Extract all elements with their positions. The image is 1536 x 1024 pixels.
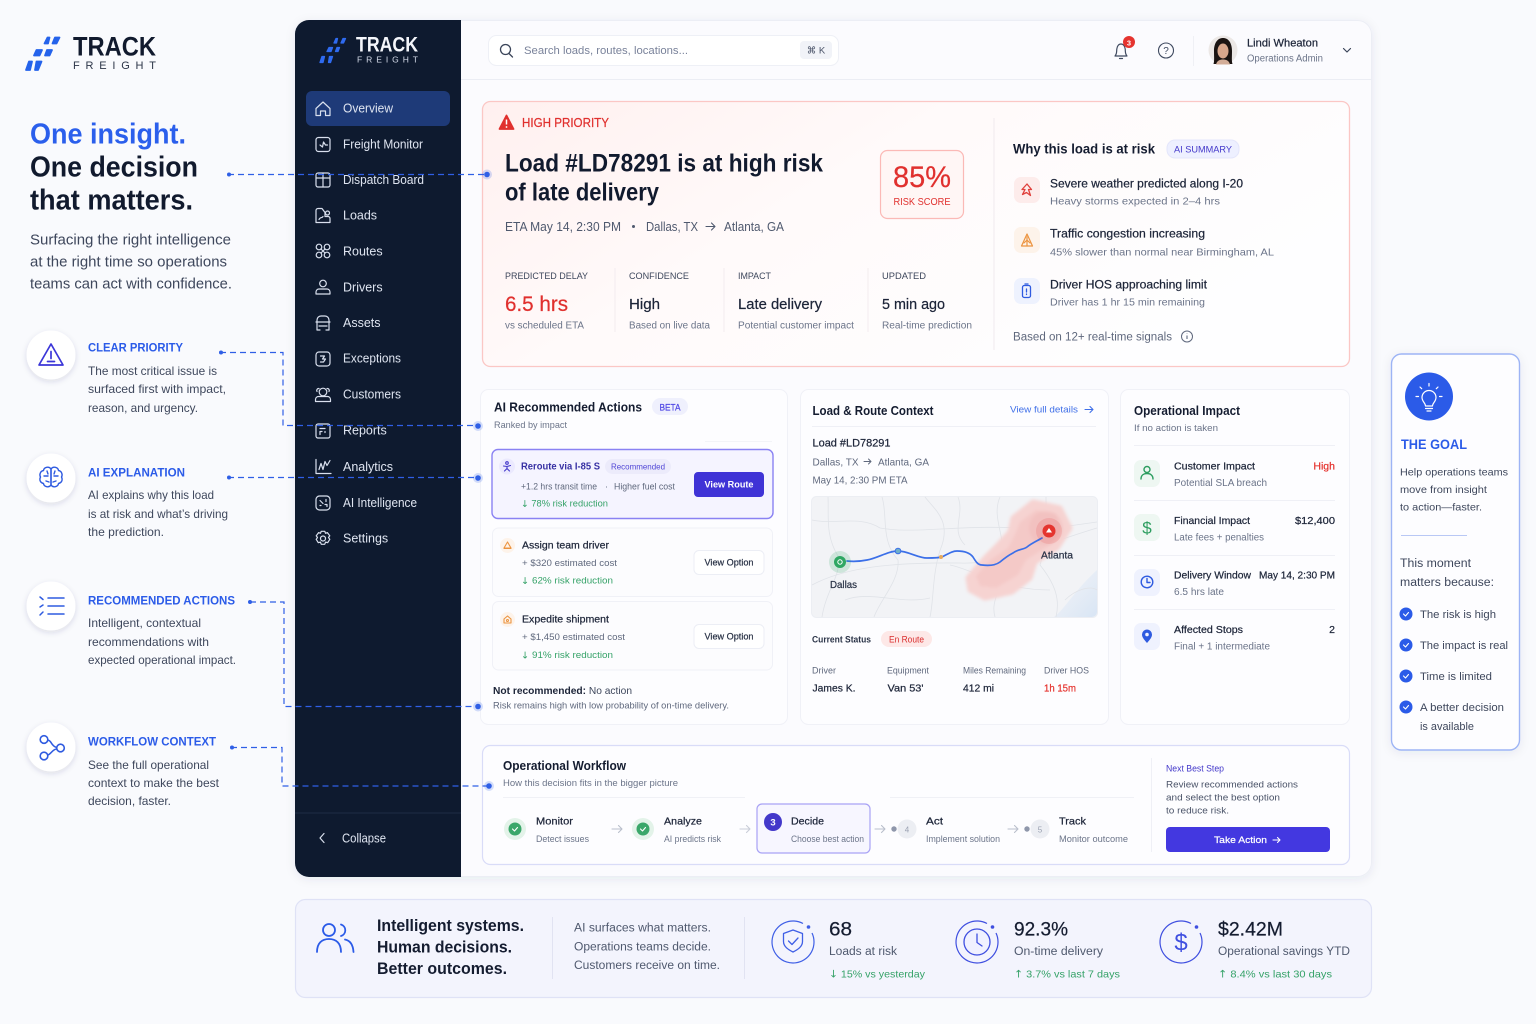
brand logo: TRACK xyxy=(73,32,156,62)
check: impact: The impact is real xyxy=(1420,640,1508,652)
nav: AI intelligence xyxy=(316,496,417,510)
option: reroute via I-85 S: ↓ 78% risk reduction xyxy=(521,499,608,510)
feature: workflow context xyxy=(26,722,220,808)
why this moment matters xyxy=(1400,558,1494,589)
panel: AI recommended actions: AI Recommended Actions xyxy=(494,400,642,415)
sidebar logo: FREIGHT xyxy=(357,55,418,65)
row: financial impact: $ xyxy=(1142,519,1152,538)
sidebar logo xyxy=(320,34,418,65)
connector lines xyxy=(219,170,494,791)
option: assign team driver: Assign team driver xyxy=(522,540,609,552)
check: time: Time is limited xyxy=(1420,671,1492,683)
ETA and route line: Dallas, TX xyxy=(646,220,699,234)
row: affected stops: Affected Stops xyxy=(1174,624,1243,636)
row: affected stops: Final + 1 intermediate xyxy=(1174,642,1270,653)
nav: reports: Reports xyxy=(343,424,387,438)
feature: recommended actions: recommendations with xyxy=(88,636,209,649)
icon: dollar xyxy=(1160,921,1202,963)
load facts: Driver HOS xyxy=(1044,666,1089,676)
load facts: Equipment xyxy=(887,666,929,676)
nav: drivers xyxy=(316,280,383,295)
row: financial impact xyxy=(1134,514,1335,544)
headline: One insight. xyxy=(30,119,186,151)
current status: Current Status xyxy=(812,635,871,645)
row: delivery window: Delivery Window xyxy=(1174,570,1251,582)
checklist xyxy=(1400,608,1508,733)
nav: assets: Assets xyxy=(343,316,381,330)
ETA and route line: ETA May 14, 2:30 PM xyxy=(505,220,621,234)
why this moment matters: This moment xyxy=(1400,558,1472,570)
nav: analytics: Analytics xyxy=(343,460,393,474)
feature: recommended actions: Intelligent, contextual xyxy=(88,617,201,630)
step: analyze xyxy=(632,816,721,844)
icon: list xyxy=(26,582,76,630)
button: view route xyxy=(694,472,764,497)
metric: impact: IMPACT xyxy=(738,271,771,281)
panel: operational workflow: How this decision fits in the bigger picture xyxy=(503,778,678,789)
step: decide: Choose best action xyxy=(791,834,864,844)
option: reroute via I-85 S: +1.2 hrs transit time xyxy=(521,482,597,492)
feature: recommended actions: RECOMMENDED ACTIONS xyxy=(88,594,235,608)
load facts: Van 53' xyxy=(888,683,924,695)
panel: operational impact: Operational Impact xyxy=(1134,403,1241,418)
nav: loads xyxy=(316,208,377,223)
nav: assets xyxy=(316,316,381,330)
step: analyze: Analyze xyxy=(664,816,702,828)
route and ETA: Dallas, TX xyxy=(812,457,858,469)
row: customer impact: High xyxy=(1313,461,1335,473)
panel: the goal: THE GOAL xyxy=(1401,437,1467,452)
feature: clear priority: surfaced first with impact, xyxy=(88,383,226,396)
button: take action xyxy=(1166,827,1330,852)
waypoints xyxy=(895,548,943,559)
stat: loads at risk xyxy=(772,920,926,981)
AI summary pill xyxy=(1167,140,1239,158)
reason: driver HOS xyxy=(1014,278,1208,309)
step: decide: Decide xyxy=(791,816,824,828)
arrow xyxy=(875,826,885,832)
tagline xyxy=(377,917,524,978)
feature: workflow context: decision, faster. xyxy=(88,795,171,808)
next best step: and select the best option xyxy=(1166,793,1280,804)
row: delivery window xyxy=(1134,569,1335,598)
nav: dispatch board: Dispatch Board xyxy=(343,173,424,187)
arrow xyxy=(1008,826,1018,832)
metric: confidence: CONFIDENCE xyxy=(629,271,689,281)
metric: impact: Late delivery xyxy=(738,296,822,313)
next best step: to reduce risk. xyxy=(1166,806,1229,817)
current status: En Route xyxy=(889,635,924,645)
icon: workflow nodes xyxy=(26,722,76,772)
metric: confidence: Based on live data xyxy=(629,321,710,332)
next best step: Next Best Step xyxy=(1166,764,1224,774)
step: analyze: AI predicts risk xyxy=(664,834,721,844)
supporting text: Operations teams decide. xyxy=(574,942,711,954)
nav: reports xyxy=(316,424,387,438)
search box: Search loads, routes, locations... xyxy=(524,45,688,57)
route and ETA: Atlanta, GA xyxy=(878,457,929,469)
alert headline xyxy=(505,150,823,207)
stat: operational savings: $2.42M xyxy=(1218,920,1283,941)
alert headline: of late delivery xyxy=(505,179,659,207)
panel: sidebar xyxy=(295,20,461,877)
intro paragraph xyxy=(30,233,232,293)
step: act: Act xyxy=(926,816,943,828)
step: act: Implement solution xyxy=(926,834,1000,844)
panel: operational impact: If no action is taken xyxy=(1134,423,1218,434)
button: take action: Take Action xyxy=(1214,835,1267,846)
nav: overview active xyxy=(306,91,450,126)
tagline: Better outcomes. xyxy=(377,960,507,978)
metric: confidence xyxy=(629,271,710,332)
row: delivery window: 6.5 hrs late xyxy=(1174,587,1224,598)
headline xyxy=(30,119,198,217)
stat: on-time delivery: On-time delivery xyxy=(1014,946,1103,958)
icon: dollar: $ xyxy=(1174,930,1188,957)
option: expedite shipment: + $1,450 estimated cost xyxy=(522,632,625,643)
AI summary pill: AI SUMMARY xyxy=(1174,145,1232,155)
option: expedite shipment xyxy=(492,602,772,670)
panel: operational workflow: Operational Workflow xyxy=(503,758,627,773)
feature: AI explanation: AI explains why this load xyxy=(88,489,214,502)
feature: clear priority xyxy=(26,330,226,415)
step: track: Monitor outcome xyxy=(1059,834,1128,844)
step: monitor: Monitor xyxy=(536,816,574,828)
notification bell xyxy=(1115,36,1135,58)
row: customer impact xyxy=(1134,460,1335,489)
option: reroute via I-85 S: Higher fuel cost xyxy=(614,482,675,492)
stat: operational savings: ↑ 8.4% vs last 30 days xyxy=(1218,969,1332,981)
goal description: move from insight xyxy=(1400,484,1487,496)
intro paragraph: Surfacing the right intelligence xyxy=(30,233,231,249)
check: risk: The risk is high xyxy=(1420,609,1496,621)
metric: predicted delay: PREDICTED DELAY xyxy=(505,271,588,281)
icon: lightbulb xyxy=(1405,372,1453,420)
feature: clear priority: The most critical issue is xyxy=(88,365,217,378)
next best step: Review recommended actions xyxy=(1166,780,1298,791)
nav: customers: Customers xyxy=(343,388,401,402)
stat: on-time delivery: 92.3% xyxy=(1014,920,1068,941)
nav: freight monitor: Freight Monitor xyxy=(343,138,423,152)
route line xyxy=(847,538,1042,565)
feature: AI explanation: the prediction. xyxy=(88,526,164,539)
alert headline: Load #LD78291 is at high risk xyxy=(505,150,823,178)
reason: severe weather xyxy=(1014,177,1243,208)
panel: operational workflow xyxy=(482,746,1350,864)
help icon xyxy=(1158,43,1174,58)
sidebar logo: TRACK xyxy=(356,34,418,57)
why this load is at risk xyxy=(1013,140,1274,344)
panel: the goal xyxy=(1392,354,1520,750)
option: expedite shipment: ↓ 91% risk reduction xyxy=(521,650,613,661)
panel: AI recommended actions: Ranked by impact xyxy=(494,420,567,431)
row: affected stops: 2 xyxy=(1329,624,1335,636)
feature: AI explanation: is at risk and what’s driving xyxy=(88,508,228,521)
user profile: Operations Admin xyxy=(1247,54,1323,65)
stat: loads at risk: ↓ 15% vs yesterday xyxy=(829,969,926,981)
nav: exceptions: Exceptions xyxy=(343,352,401,366)
brand logo: FREIGHT xyxy=(73,60,156,72)
current status xyxy=(812,631,932,647)
stat: on-time delivery: ↑ 3.7% vs last 7 days xyxy=(1014,969,1120,981)
pin: Dallas: Dallas xyxy=(830,580,857,591)
feature: workflow context: WORKFLOW CONTEXT xyxy=(88,735,217,749)
option: reroute via I-85 S: Reroute via I-85 S xyxy=(521,461,600,473)
step: act: 4 xyxy=(905,826,910,835)
help icon: ? xyxy=(1163,46,1169,57)
icon: alert triangle xyxy=(500,116,514,129)
icon: people xyxy=(317,924,354,952)
beta pill xyxy=(652,398,688,415)
metric: predicted delay: 6.5 hrs xyxy=(505,293,568,316)
route and ETA: May 14, 2:30 PM ETA xyxy=(812,475,908,487)
goal description: to action—faster. xyxy=(1400,502,1482,514)
step: decide: 3 xyxy=(770,818,776,829)
reason: traffic congestion: Traffic congestion increasing xyxy=(1050,229,1205,241)
headline: that matters. xyxy=(30,185,193,217)
dashboard card xyxy=(295,20,1372,877)
why this moment matters: matters because: xyxy=(1400,577,1494,589)
panel: operational impact xyxy=(1120,390,1350,724)
goal description: Help operations teams xyxy=(1400,467,1508,479)
nav: loads: Loads xyxy=(343,209,377,223)
ETA and route line: Atlanta, GA xyxy=(724,220,785,234)
panel: bottom summary band xyxy=(296,900,1372,998)
nav: overview active: Overview xyxy=(343,102,394,116)
reason: traffic congestion: 45% slower than normal near Birmingham, AL xyxy=(1050,247,1274,259)
step: track: 5 xyxy=(1038,826,1043,835)
check: better decision xyxy=(1400,700,1504,733)
row: financial impact: $12,400 xyxy=(1295,515,1335,527)
supporting text: Customers receive on time. xyxy=(574,960,720,972)
stat: loads at risk: Loads at risk xyxy=(829,946,897,958)
nav: drivers: Drivers xyxy=(343,281,383,295)
nav: collapse: Collapse xyxy=(342,832,386,846)
load facts: Driver xyxy=(812,666,836,676)
metric: confidence: High xyxy=(629,296,660,313)
button: view option: View Option xyxy=(704,632,754,643)
row: affected stops xyxy=(1134,623,1335,653)
ETA and route line xyxy=(505,220,785,234)
not recommended note xyxy=(493,685,729,712)
load facts: 1h 15m xyxy=(1044,683,1076,695)
not recommended note: Risk remains high with low probability of on-time delivery. xyxy=(493,701,729,712)
step: monitor: Detect issues xyxy=(536,834,589,844)
tagline: Intelligent systems. xyxy=(377,917,524,935)
option: reroute via I-85 S: Recommended xyxy=(611,463,665,472)
stat: on-time delivery xyxy=(956,920,1120,981)
tagline: Human decisions. xyxy=(377,939,512,957)
nav: collapse xyxy=(320,832,386,846)
reason: traffic congestion xyxy=(1014,227,1274,259)
route map xyxy=(812,496,1098,618)
metric: updated xyxy=(882,271,972,332)
signals footnote: Based on 12+ real-time signals xyxy=(1013,332,1172,344)
panel: high priority alert xyxy=(482,102,1350,366)
load facts: James K. xyxy=(812,683,856,695)
icon: shield xyxy=(772,921,814,963)
load facts xyxy=(812,666,1089,695)
option: assign team driver: + $320 estimated cost xyxy=(522,558,617,569)
step: decide xyxy=(757,804,870,853)
arrow xyxy=(612,826,622,832)
option: assign team driver xyxy=(492,528,772,596)
user profile xyxy=(1208,36,1350,65)
load facts: 412 mi xyxy=(963,683,994,695)
stat: operational savings: Operational savings YTD xyxy=(1218,946,1350,958)
option: reroute via I-85 S xyxy=(492,450,773,518)
step: act xyxy=(891,816,1000,844)
why this load is at risk: Why this load is at risk xyxy=(1013,141,1155,157)
metric: updated: UPDATED xyxy=(882,271,927,281)
check: better decision: is available xyxy=(1420,721,1474,733)
link: view full details: View full details xyxy=(1010,405,1078,416)
nav: settings xyxy=(316,531,388,546)
risk score badge: RISK SCORE xyxy=(894,197,951,208)
feature: AI explanation: AI EXPLANATION xyxy=(88,466,185,480)
search box xyxy=(488,36,838,66)
nav: exceptions xyxy=(316,352,401,366)
nav: settings: Settings xyxy=(343,532,388,546)
panel: load and route context: Load #LD78291 xyxy=(812,438,890,450)
panel: load and route context: Load & Route Context xyxy=(812,403,934,418)
stat: loads at risk: 68 xyxy=(829,920,852,941)
headline: One decision xyxy=(30,152,198,184)
pin: Atlanta: Atlanta xyxy=(1041,551,1073,562)
row: financial impact: Financial Impact xyxy=(1174,515,1250,527)
pin: Dallas xyxy=(829,551,857,591)
feature: AI explanation xyxy=(26,454,228,539)
metric: impact xyxy=(738,271,854,332)
panel: load and route context xyxy=(800,390,1108,724)
metric: predicted delay xyxy=(505,271,588,332)
header bar xyxy=(461,36,1372,80)
notification bell: 3 xyxy=(1127,39,1131,48)
risk score badge: 85% xyxy=(893,161,951,194)
feature: recommended actions: expected operational impact. xyxy=(88,654,236,667)
intro paragraph: teams can act with confidence. xyxy=(30,277,232,293)
panel: high priority alert: HIGH PRIORITY xyxy=(522,116,610,130)
reason: driver HOS: Driver HOS approaching limit xyxy=(1050,280,1208,292)
search box: ⌘ K xyxy=(807,46,826,57)
nav: AI intelligence: AI Intelligence xyxy=(343,496,417,510)
metric: predicted delay: vs scheduled ETA xyxy=(505,321,584,332)
step: track: Track xyxy=(1059,816,1087,828)
metric: updated: 5 min ago xyxy=(882,296,945,313)
check: better decision: A better decision xyxy=(1420,702,1504,714)
row: delivery window: May 14, 2:30 PM xyxy=(1259,570,1335,582)
button: view option xyxy=(694,624,764,648)
goal description xyxy=(1400,467,1508,514)
feature: recommended actions xyxy=(26,582,236,667)
not recommended note: Not recommended: No action xyxy=(493,685,632,697)
button: view route: View Route xyxy=(704,480,754,491)
supporting text xyxy=(574,923,720,972)
icon: warning triangle xyxy=(26,330,76,380)
row: customer impact: Customer Impact xyxy=(1174,461,1255,473)
load facts: Miles Remaining xyxy=(963,666,1026,676)
row: financial impact: Late fees + penalties xyxy=(1174,533,1264,544)
beta pill: BETA xyxy=(660,403,680,413)
feature: workflow context: context to make the best xyxy=(88,777,220,790)
user profile: Lindi Wheaton xyxy=(1247,38,1318,50)
step: track xyxy=(1024,816,1128,844)
metric: updated: Real-time prediction xyxy=(882,321,972,332)
reason: driver HOS: Driver has 1 hr 15 min remaining xyxy=(1050,297,1205,309)
nav: routes: Routes xyxy=(343,245,383,259)
option: expedite shipment: Expedite shipment xyxy=(522,614,609,626)
icon: clock xyxy=(956,921,998,963)
intro paragraph: at the right time so operations xyxy=(30,255,227,271)
button: view option xyxy=(694,550,764,574)
panel: AI recommended actions xyxy=(480,390,788,724)
icon: brain xyxy=(26,454,76,502)
option: reroute via I-85 S: · xyxy=(605,482,608,492)
brand logo xyxy=(26,32,156,72)
button: view option: View Option xyxy=(704,558,754,569)
step: monitor xyxy=(504,816,589,844)
supporting text: AI surfaces what matters. xyxy=(574,923,711,935)
nav: routes xyxy=(316,244,383,259)
option: assign team driver: ↓ 62% risk reduction xyxy=(521,576,613,587)
nav: customers xyxy=(316,388,401,402)
pin: Atlanta xyxy=(1036,518,1073,562)
arrow xyxy=(740,826,750,832)
stat: operational savings xyxy=(1160,920,1350,981)
row: customer impact: Potential SLA breach xyxy=(1174,478,1267,489)
feature: workflow context: See the full operational xyxy=(88,759,209,772)
reason: severe weather: Heavy storms expected in 2–4 hrs xyxy=(1050,196,1220,208)
feature: clear priority: CLEAR PRIORITY xyxy=(88,341,183,355)
metric: impact: Potential customer impact xyxy=(738,321,854,332)
next best step xyxy=(1166,764,1330,852)
risk score badge xyxy=(880,150,964,218)
reason: severe weather: Severe weather predicted along I-20 xyxy=(1050,179,1243,191)
nav: analytics xyxy=(316,460,393,474)
route and ETA xyxy=(812,457,929,487)
feature: clear priority: reason, and urgency. xyxy=(88,402,198,415)
